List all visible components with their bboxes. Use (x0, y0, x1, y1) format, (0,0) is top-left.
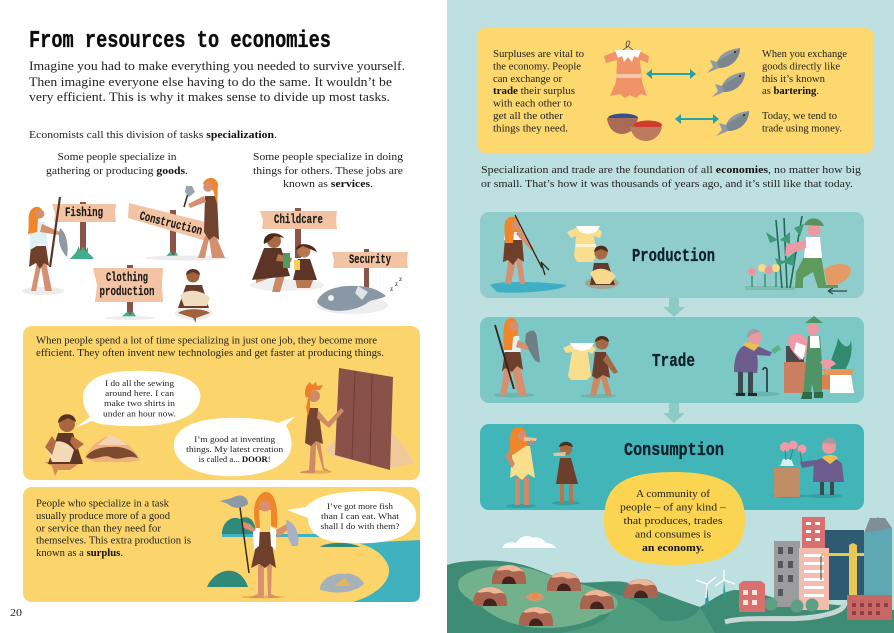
icon: shoreline (353, 540, 420, 602)
arrow: bowls to fish (675, 114, 719, 124)
speech bubble: sewing: make two shirts in (104, 398, 176, 408)
services text (253, 152, 404, 190)
grey tower (774, 541, 800, 607)
icon: old lady paying (732, 329, 781, 396)
speech bubble: fish (287, 491, 416, 543)
surplus trade text: get all the other (493, 111, 564, 122)
icon: dress and sewing person (567, 226, 619, 289)
speech bubble: door (174, 416, 296, 476)
icon: builder woman (184, 178, 225, 258)
icon: woman drinking (505, 427, 537, 508)
arrow: dress to fish (646, 69, 696, 79)
sign: childcare: Childcare (274, 213, 323, 227)
goods text: Some people specialize in (58, 152, 177, 163)
icon: man with dress (563, 336, 618, 398)
surplus text: themselves. This extra production is (36, 536, 191, 546)
icon: dress (604, 41, 649, 98)
speech bubble: fish: shall I do with them? (320, 521, 400, 531)
bartering text: trade using money. (762, 124, 842, 134)
arrow: production to trade (663, 298, 685, 317)
icon: child drinking (552, 442, 580, 505)
sign: childcare (260, 208, 337, 258)
icon: fish pile (320, 574, 364, 593)
callout: economy definition (604, 472, 745, 565)
economies text: or small. That’s how it was thousands of years ago, and it’s still like that today. (481, 178, 853, 190)
panel: production (480, 212, 864, 298)
icon: flower seller at stall (784, 316, 854, 399)
icon: two fish (707, 48, 745, 97)
sign: clothing production: Clothing (106, 271, 148, 285)
dark blue tower (825, 530, 864, 600)
trees (764, 598, 818, 612)
icon: sleeping wolf (316, 275, 402, 314)
landscape: hills and village (447, 560, 894, 633)
efficiency text (36, 336, 384, 359)
icon: cloud (502, 536, 556, 548)
icon: bowls of berries (607, 114, 662, 141)
pink tower (802, 517, 825, 553)
page number: 20 (10, 607, 23, 619)
road (725, 602, 845, 622)
icon: sleeping wolf: z (395, 280, 398, 288)
surplus text: known as a surplus. (36, 548, 123, 559)
icon: sewing person (44, 414, 84, 476)
icon: city (696, 517, 892, 622)
bartering text: When you exchange (762, 49, 847, 60)
icon: bushes (207, 517, 360, 587)
icon: sewing person (175, 269, 213, 323)
icon: woman fishing (490, 215, 567, 293)
speech bubble: sewing: around here. I can (105, 388, 175, 398)
sign: security: Security (349, 253, 391, 267)
surplus trade text: can exchange or (493, 74, 562, 85)
sign: security (332, 249, 408, 289)
sign: construction: Construction (138, 209, 204, 239)
intro paragraph: Imagine you had to make everything you needed to survive yourself. (29, 59, 405, 73)
sign: clothing production (93, 265, 163, 320)
icon: fisher woman holding fish (220, 492, 298, 598)
panel: trade (480, 316, 864, 403)
speech bubble: sewing: under an hour now. (103, 408, 176, 418)
surplus text (36, 498, 191, 559)
village clearing (458, 566, 618, 628)
intro paragraph: Then imagine everyone else having to do the same. It wouldn’t be (29, 75, 392, 89)
intro paragraph (29, 59, 405, 104)
mid-green band (560, 590, 715, 633)
heading: trade: Trade (652, 352, 695, 372)
speech bubble: door: things. My latest creation (186, 444, 284, 454)
economies text (481, 164, 862, 190)
callout: economy definition: A community of (636, 488, 710, 500)
icon: adult and child (250, 233, 324, 292)
surplus trade text: trade their surplus (493, 86, 575, 97)
speech bubble: fish: I’ve got more fish (327, 501, 394, 511)
callout: economy definition: and consumes is (635, 528, 711, 540)
icon: fabric pile (85, 435, 140, 462)
efficiency text: efficient. They often invent new technologies and get faster at producing things. (36, 348, 384, 359)
bartering text: goods directly like (762, 62, 840, 72)
icon: inventor (299, 382, 344, 474)
icon: vase on table (772, 440, 808, 498)
icon: sleeping wolf: z (390, 285, 393, 293)
background: left page (0, 0, 447, 633)
callout: economy definition: an economy. (642, 542, 704, 554)
sign: fishing (52, 202, 116, 259)
surplus text: or service than they need for (36, 524, 162, 534)
hills (447, 560, 894, 633)
icon: fisher woman (22, 197, 68, 295)
icon: campfire (526, 590, 544, 601)
surplus trade text (493, 49, 584, 134)
wind turbines (696, 570, 735, 605)
panel: efficiency (23, 326, 420, 480)
heading: consumption: Consumption (624, 441, 724, 461)
surplus trade text: with each other to (493, 98, 572, 110)
surplus trade text: Surpluses are vital to (493, 49, 584, 60)
bartering text: Today, we tend to (762, 111, 837, 122)
services text: things for others. These jobs are (253, 166, 403, 177)
title: From resources to economies (29, 28, 331, 55)
sign: clothing production: production (100, 285, 154, 299)
speech bubble: sewing (75, 371, 200, 428)
surplus trade text: the economy. People (493, 62, 581, 72)
speech bubble: door: I’m good at inventing (194, 434, 276, 444)
bartering text: this it’s known (762, 74, 826, 85)
speech bubble: door: is called a... DOOR! (199, 454, 271, 464)
crane (821, 543, 864, 596)
goods text (46, 152, 188, 177)
panel: bartering (477, 28, 874, 153)
goods text: gathering or producing goods . (46, 166, 188, 177)
icon: woman with fish (494, 318, 540, 398)
surplus text: People who specialize in a task (36, 498, 170, 510)
callout: economy definition: that produces, trades (624, 515, 722, 527)
panel: surplus (23, 487, 420, 602)
icon: sleeping wolf: z (399, 275, 402, 283)
icon: door (335, 368, 393, 470)
low red building (847, 595, 892, 620)
icon: old lady with flower (798, 438, 844, 498)
sign: construction (128, 203, 229, 260)
bartering text: as bartering. (762, 86, 819, 97)
sign: fishing: Fishing (65, 206, 103, 220)
services text: Some people specialize in doing (253, 152, 404, 163)
surplus trade text: things they need. (493, 124, 568, 134)
small house (739, 581, 765, 612)
specialization sentence: Economists call this division of tasks specialization . (29, 130, 277, 141)
icon: huts (473, 565, 658, 626)
panel: consumption (480, 424, 864, 510)
services text: known as services . (283, 179, 373, 190)
arrow: trade to consumption (663, 403, 685, 423)
intro paragraph: very efficient. This is why it makes sense to divide up most tasks. (29, 90, 390, 104)
speech bubble: fish: than I can eat. What (321, 511, 400, 521)
efficiency text: When people spend a lot of time specializing in just one job, they become more (36, 336, 377, 346)
icon: gardener with plants (745, 216, 851, 294)
icon: sand mound (325, 432, 414, 468)
bartering text (762, 49, 847, 134)
economies text: Specialization and trade are the foundation of all economies , no matter how big (481, 164, 862, 176)
speech bubble: sewing: I do all the sewing (105, 378, 175, 388)
icon: fish (716, 111, 749, 136)
teal tower (864, 517, 892, 595)
background: right page (447, 0, 894, 633)
callout: economy definition: people – of any kind – (620, 502, 727, 514)
heading: production: Production (632, 247, 715, 267)
surplus text: usually produce more of a good (36, 511, 171, 522)
